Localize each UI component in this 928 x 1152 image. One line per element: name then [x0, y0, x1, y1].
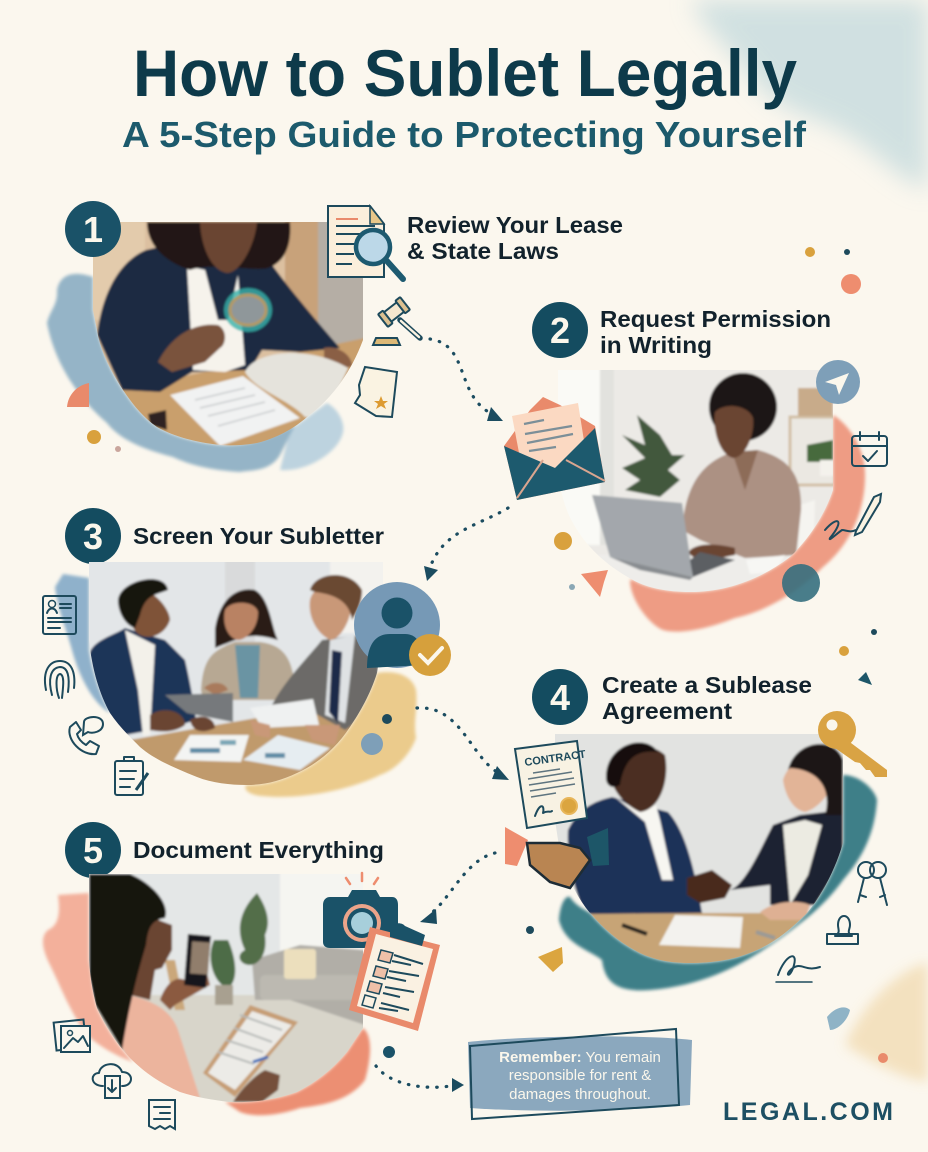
photo: reviewing lease with magnifier: [93, 222, 363, 446]
photo: three people screening: [89, 562, 378, 785]
watercolor splash: step 1: [47, 274, 343, 472]
icon: open envelope with letter: [504, 397, 605, 500]
step number 5: 5: [83, 830, 103, 871]
decoration dot bottom right: [878, 1053, 888, 1063]
watercolor splash: step 5 bottom: [225, 1028, 370, 1115]
decorations step 3: [361, 714, 392, 755]
decoration dot: [383, 1046, 395, 1058]
step title 3: Screen Your Subletter: [133, 523, 384, 549]
decorations step 2: [554, 247, 877, 635]
watercolor splash: step 3 yellow: [245, 672, 416, 797]
icon: photo stack: [54, 1020, 90, 1052]
icon: signature and pen: [825, 494, 881, 539]
step title 1: & State Laws: [407, 238, 559, 264]
icon: clipboard with checklist: [349, 923, 440, 1031]
panel: step 4: [505, 646, 887, 1030]
photo: handshake over contract: [550, 730, 850, 970]
icon: Arizona map with star: [355, 367, 397, 417]
callout: reminder: Remember: You remain: [499, 1049, 661, 1066]
watercolor splash: step 4: [559, 775, 877, 990]
icon: clipboard checklist: [115, 757, 148, 795]
step number 4: [532, 669, 588, 725]
icon: signature: [776, 956, 820, 982]
icon: cloud upload: [93, 1064, 131, 1098]
step number 4: 4: [550, 677, 570, 718]
step title 2: in Writing: [600, 332, 712, 358]
step number 1: 1: [83, 209, 103, 250]
step title 1: [407, 212, 623, 264]
panel: step 2: [504, 247, 887, 635]
icon: document with magnifier: [328, 206, 403, 279]
icon: contract with seal: CONTRACT: [524, 748, 587, 769]
watercolor wash: top right: [690, 0, 928, 190]
callout: reminder: responsible for rent &: [509, 1067, 651, 1084]
icon: calendar: [852, 432, 887, 466]
icon: receipt: [149, 1100, 175, 1129]
step title 4: Agreement: [602, 698, 732, 724]
callout: reminder: damages throughout.: [509, 1086, 651, 1103]
watercolor splash: step 5: [43, 893, 133, 1062]
icon: handshake: [505, 827, 609, 888]
step number 2: [532, 302, 588, 358]
icon: contract with seal: [515, 741, 587, 828]
icon: phone and speech bubble: [69, 717, 103, 754]
photo: woman photographing living room: [85, 870, 370, 1110]
icon: paper plane badge: [816, 360, 860, 404]
title: How to Sublet Legally: [133, 36, 797, 110]
step number 1: [65, 201, 121, 257]
panel: step 3: [43, 508, 451, 797]
step title 5: Document Everything: [133, 837, 384, 863]
decorations step 1: [67, 383, 121, 452]
step number 5: [65, 822, 121, 878]
step title 4: [602, 672, 812, 724]
panel: step 1: [47, 201, 623, 472]
photo: woman on laptop: [589, 370, 833, 592]
arrow: step 1 to step 2: [430, 339, 503, 421]
arrow: step 2 to step 3: [424, 508, 508, 581]
icon: ID card: [43, 596, 76, 634]
decorations step 4: [526, 646, 872, 1030]
panel: step 5: [43, 822, 440, 1129]
watercolor splash: step 3 blue: [55, 574, 110, 713]
arrow: step 3 to step 4: [417, 708, 509, 780]
step number 2: 2: [550, 310, 570, 351]
step title 2: Request Permission: [600, 306, 831, 332]
watercolor splash: step 2: [630, 415, 865, 632]
icon: camera: [323, 873, 398, 948]
icon: applicant profile badge: [354, 582, 451, 676]
arrow: step 5 to reminder: [376, 1066, 464, 1092]
subtitle: A 5-Step Guide to Protecting Yourself: [122, 114, 807, 155]
step number 3: [65, 508, 121, 564]
step title 4: Create a Sublease: [602, 672, 812, 698]
icon: gold key: [818, 711, 887, 777]
icon: stamp: [827, 916, 858, 944]
step title 2: [600, 306, 831, 358]
logo: LEGAL.COM: [723, 1098, 893, 1126]
callout: reminder: [468, 1029, 692, 1119]
step number 3: 3: [83, 516, 103, 557]
watercolor wash: bottom right: [845, 962, 928, 1082]
icon: keys: [858, 862, 887, 905]
icon: gavel: [373, 297, 420, 345]
arrow: step 4 to step 5: [420, 853, 495, 924]
icon: fingerprint: [45, 661, 74, 698]
step title 1: Review Your Lease: [407, 212, 623, 238]
